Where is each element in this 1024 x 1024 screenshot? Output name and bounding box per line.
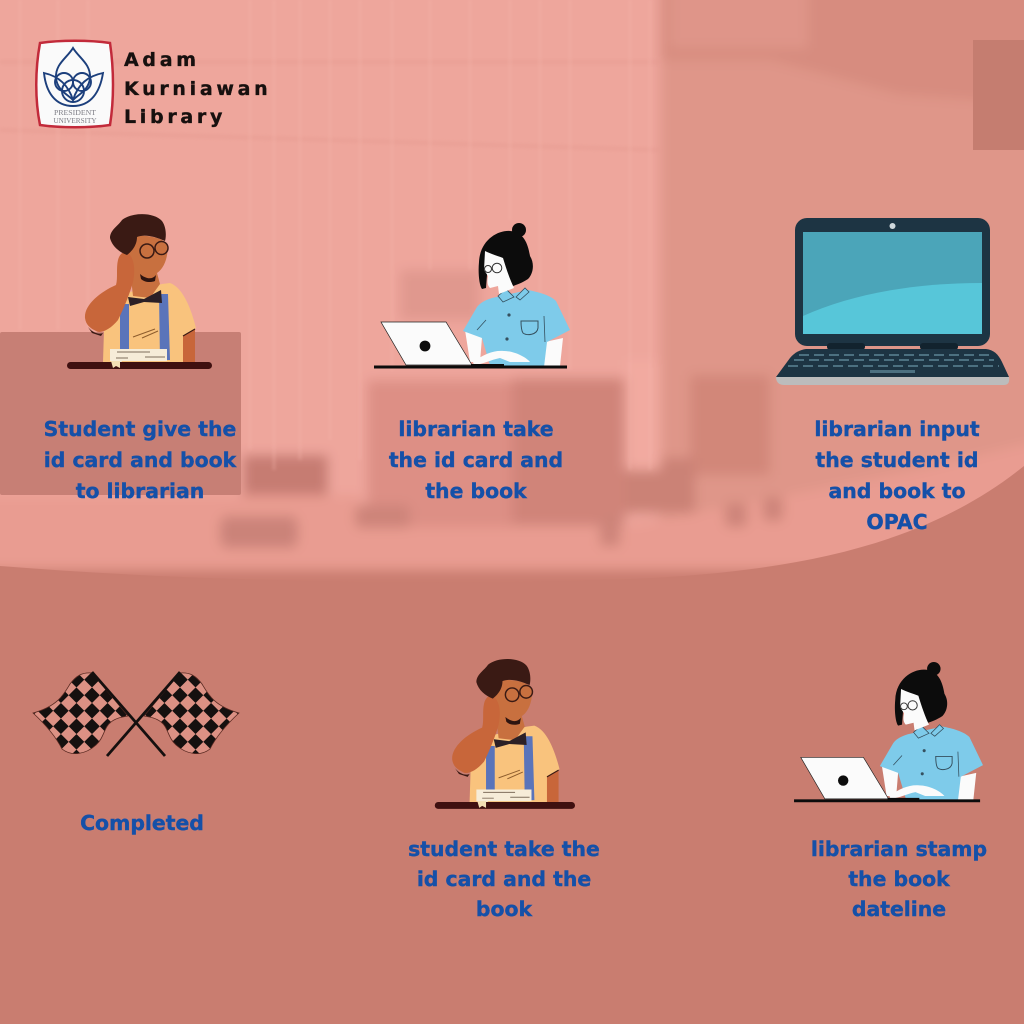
logo xyxy=(36,41,113,127)
step 4 caption: dateline xyxy=(852,897,946,921)
step 4 caption: librarian stamp xyxy=(811,837,987,861)
library name heading: Library xyxy=(124,106,226,128)
step 2 caption: the book xyxy=(425,479,527,503)
step 3 illustration: laptop xyxy=(776,218,1009,385)
logo: UNIVERSITY xyxy=(53,117,97,125)
step 5 illustration: student xyxy=(435,659,575,809)
step 3 caption: librarian input xyxy=(814,417,980,441)
library name heading: Adam xyxy=(124,49,200,71)
step 5 caption: student take the xyxy=(408,837,600,861)
step 4 illustration: librarian xyxy=(794,662,983,802)
step 3 caption: and book to xyxy=(828,479,966,503)
step 6 caption: Completed xyxy=(80,811,204,835)
library name heading: Kurniawan xyxy=(124,78,271,100)
step 1 caption: id card and book xyxy=(44,448,237,472)
step 2 illustration: librarian xyxy=(374,223,570,368)
library name heading xyxy=(124,49,271,128)
step 4 caption: the book xyxy=(848,867,950,891)
logo: PRESIDENT xyxy=(54,108,96,117)
step 3 caption: the student id xyxy=(816,448,978,472)
step 1 caption: to librarian xyxy=(76,479,204,503)
step 3 caption: OPAC xyxy=(866,510,928,534)
step 1 illustration: student xyxy=(67,214,212,369)
step 2 caption: the id card and xyxy=(389,448,563,472)
step 6 illustration: checkered flags xyxy=(33,672,239,756)
step 5 caption: book xyxy=(476,897,533,921)
step 1 caption: Student give the xyxy=(44,417,236,441)
step 5 caption: id card and the xyxy=(417,867,591,891)
step 2 caption: librarian take xyxy=(398,417,554,441)
